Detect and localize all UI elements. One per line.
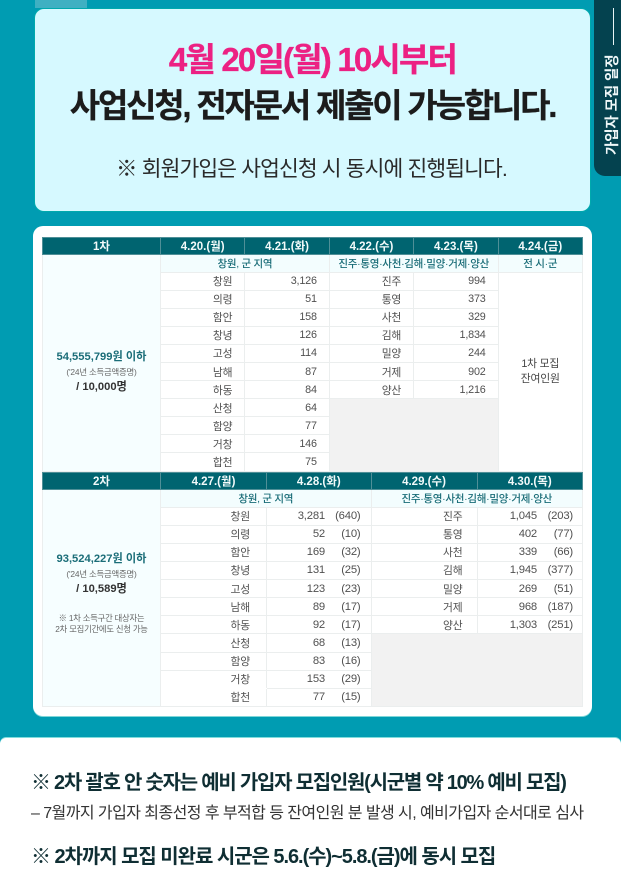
table: round 2 schedule: 93,524,227원 이하 xyxy=(56,553,146,565)
table: round 1 schedule: 창녕 xyxy=(213,330,232,342)
table: round 1 schedule: 함안 xyxy=(213,312,232,324)
table: round 2 schedule: (187) xyxy=(548,601,573,613)
table: round 1 schedule: 1,216 xyxy=(460,384,486,396)
table: round 1 schedule xyxy=(42,237,583,472)
table: round 2 schedule: 진주·통영·사천·김해·밀양·거제·양산 xyxy=(401,492,552,504)
note: reserve recruits: ※ 2차 괄호 안 숫자는 예비 가입자 모집인원(시군별 약 10% 예비 모집) xyxy=(31,772,566,794)
table: round 1 schedule: 87 xyxy=(305,366,317,378)
table: round 2 schedule: (10) xyxy=(341,528,360,540)
table: round 1 schedule: 산청 xyxy=(213,403,232,415)
table: round 2 schedule: 함양 xyxy=(231,656,250,668)
table: round 2 schedule: 89 xyxy=(313,601,325,613)
table: round 1 schedule: 902 xyxy=(468,366,486,378)
note: reserve screening: – 7월까지 가입자 최종선정 후 부적합 등 잔여인원 분 발생 시, 예비가입자 순서대로 심사 xyxy=(31,805,584,822)
table: round 2 schedule: ※ 1차 소득구간 대상자는 xyxy=(59,612,144,622)
table: round 1 schedule: 51 xyxy=(305,293,317,305)
table: round 2 schedule: 거창 xyxy=(231,674,250,686)
table: round 1 schedule: 진주·통영·사천·김해·밀양·거제·양산 xyxy=(338,258,489,270)
table: round 2 schedule: 83 xyxy=(313,655,325,667)
table: round 1 schedule: 창원 xyxy=(213,276,232,288)
table: round 1 schedule: 4.21.(화) xyxy=(265,240,309,252)
panel: schedule tables xyxy=(33,226,592,716)
table: round 2 schedule: 4.27.(월) xyxy=(192,476,235,488)
table: round 2 schedule: 402 xyxy=(519,528,537,540)
table: round 2 schedule: (32) xyxy=(341,546,360,558)
table: round 2 schedule: 창녕 xyxy=(231,565,250,577)
table: round 2 schedule: 169 xyxy=(307,546,325,558)
table: round 1 schedule: 4.20.(월) xyxy=(181,240,225,252)
table: round 1 schedule: 거창 xyxy=(213,439,232,451)
tab label: 가입자 모집 일정 xyxy=(605,54,621,155)
table: round 2 schedule: 131 xyxy=(307,564,325,576)
table: round 1 schedule: 54,555,799원 이하 xyxy=(56,350,146,362)
heading: submission available: 사업신청, 전자문서 제출이 가능합니다. xyxy=(70,87,555,124)
table: round 1 schedule: 64 xyxy=(305,402,317,414)
table: round 1 schedule: 1차 모집 xyxy=(521,358,559,370)
side tab: recruitment schedule xyxy=(594,0,621,176)
table: round 2 schedule: 4.29.(수) xyxy=(402,476,446,488)
table: round 1 schedule: 통영 xyxy=(382,294,401,306)
table: round 1 schedule: 4.24.(금) xyxy=(518,240,562,252)
table: round 2 schedule: (25) xyxy=(341,564,360,576)
table: round 2 schedule: 함안 xyxy=(231,547,250,559)
table: round 1 schedule: 4.22.(수) xyxy=(350,240,393,252)
table: round 1 schedule: 양산 xyxy=(382,385,401,397)
table: round 2 schedule: 사천 xyxy=(443,547,462,559)
table: round 2 schedule: 창원 xyxy=(231,511,250,523)
table: round 1 schedule: 3,126 xyxy=(291,275,317,287)
table: round 1 schedule: 373 xyxy=(468,293,486,305)
table: round 2 schedule: 합천 xyxy=(231,692,250,704)
panel: application start notice xyxy=(34,8,591,212)
table: round 2 schedule: 의령 xyxy=(231,529,250,541)
table: round 1 schedule: 146 xyxy=(299,438,317,450)
table: round 2 schedule: 92 xyxy=(313,619,325,631)
table: round 2 schedule: 153 xyxy=(307,673,325,685)
table: round 2 schedule: 4.30.(목) xyxy=(508,476,552,488)
table: round 2 schedule: 3,281 xyxy=(298,510,325,522)
table: round 2 schedule: 4.28.(화) xyxy=(297,476,341,488)
table: round 1 schedule: 126 xyxy=(299,329,317,341)
table: round 2 schedule: 하동 xyxy=(231,620,250,632)
table: round 1 schedule: 김해 xyxy=(382,330,401,342)
table: round 1 schedule: 994 xyxy=(468,275,486,287)
table: round 2 schedule: (203) xyxy=(548,510,573,522)
table: round 1 schedule: 잔여인원 xyxy=(521,373,560,385)
table: round 2 schedule: 269 xyxy=(519,583,537,595)
table: round 2 schedule: 창원, 군 지역 xyxy=(238,492,293,504)
table: round 2 schedule: (13) xyxy=(341,637,360,649)
table: round 2 schedule: (23) xyxy=(341,583,360,595)
table: round 1 schedule: 거제 xyxy=(382,367,401,379)
table: round 1 schedule: 1,834 xyxy=(460,329,486,341)
table: round 2 schedule: 밀양 xyxy=(443,584,462,596)
table: round 2 schedule: (16) xyxy=(341,655,360,667)
table: round 1 schedule: 합천 xyxy=(213,457,232,469)
table: round 2 schedule xyxy=(42,472,583,707)
table: round 2 schedule: 1,303 xyxy=(510,619,537,631)
table: round 2 schedule: 통영 xyxy=(443,529,462,541)
table: round 1 schedule: ('24년 소득금액증명) xyxy=(66,366,137,376)
table: round 2 schedule: 1,045 xyxy=(510,510,537,522)
table: round 2 schedule: ('24년 소득금액증명) xyxy=(66,569,137,579)
table: round 1 schedule: 의령 xyxy=(213,294,232,306)
table: round 1 schedule: 사천 xyxy=(382,312,401,324)
table: round 2 schedule: (77) xyxy=(554,528,573,540)
table: round 1 schedule: 4.23.(목) xyxy=(434,240,478,252)
table: round 2 schedule: (29) xyxy=(341,673,360,685)
heading: start date: 4월 20일(월) 10시부터 xyxy=(169,41,456,78)
table: round 2 schedule: (377) xyxy=(548,564,573,576)
table: round 2 schedule: (15) xyxy=(341,691,360,703)
table: round 1 schedule: / 10,000명 xyxy=(76,380,127,392)
table: round 2 schedule: 2차 xyxy=(93,476,110,488)
table: round 1 schedule: 1차 xyxy=(93,240,110,252)
table: round 1 schedule: 하동 xyxy=(213,385,232,397)
table: round 2 schedule: 968 xyxy=(519,601,537,613)
table: round 2 schedule: (251) xyxy=(548,619,573,631)
table: round 1 schedule: 창원, 군 지역 xyxy=(217,258,272,270)
table: round 1 schedule: 114 xyxy=(300,347,317,359)
tab highlight at top xyxy=(35,0,87,8)
table: round 2 schedule: 김해 xyxy=(443,565,462,577)
table: round 2 schedule: 고성 xyxy=(231,584,250,596)
panel: footer notes xyxy=(0,738,621,882)
table: round 2 schedule: 양산 xyxy=(443,620,462,632)
table: round 2 schedule: 거제 xyxy=(443,602,462,614)
table: round 2 schedule: / 10,589명 xyxy=(76,583,127,595)
table: round 1 schedule: 전 시·군 xyxy=(523,258,557,270)
table: round 2 schedule: 산청 xyxy=(231,638,250,650)
text: membership note: ※ 회원가입은 사업신청 시 동시에 진행됩니다. xyxy=(116,157,507,181)
table: round 2 schedule: (51) xyxy=(554,583,573,595)
tab line xyxy=(613,8,614,45)
table: round 2 schedule: 68 xyxy=(313,637,325,649)
table: round 1 schedule: 158 xyxy=(299,311,317,323)
table: round 1 schedule: 밀양 xyxy=(382,348,401,360)
table: round 2 schedule: 52 xyxy=(313,528,325,540)
table: round 2 schedule: 1,945 xyxy=(510,564,537,576)
table: round 2 schedule: (640) xyxy=(335,510,360,522)
table: round 2 schedule: 진주 xyxy=(443,511,462,523)
table: round 1 schedule: 329 xyxy=(468,311,486,323)
table: round 1 schedule: 75 xyxy=(305,456,317,468)
table: round 2 schedule: 77 xyxy=(313,691,325,703)
table: round 1 schedule: 84 xyxy=(305,384,317,396)
table: round 2 schedule: 남해 xyxy=(231,602,250,614)
table: round 2 schedule: (17) xyxy=(341,601,360,613)
table: round 1 schedule: 고성 xyxy=(213,348,232,360)
table: round 1 schedule: 함양 xyxy=(213,421,232,433)
table: round 1 schedule: 244 xyxy=(468,347,486,359)
table: round 1 schedule: 77 xyxy=(305,420,317,432)
table: round 1 schedule: 남해 xyxy=(213,367,232,379)
table: round 2 schedule: 123 xyxy=(307,583,325,595)
table: round 1 schedule: 진주 xyxy=(382,276,401,288)
table: round 2 schedule: 2차 모집기간에도 신청 가능 xyxy=(55,624,148,634)
table: round 2 schedule: (66) xyxy=(554,546,573,558)
note: simultaneous recruitment: ※ 2차까지 모집 미완료 시군은 5.6.(수)~5.8.(금)에 동시 모집 xyxy=(31,846,495,868)
table: round 2 schedule: 339 xyxy=(519,546,537,558)
table: round 2 schedule: (17) xyxy=(341,619,360,631)
